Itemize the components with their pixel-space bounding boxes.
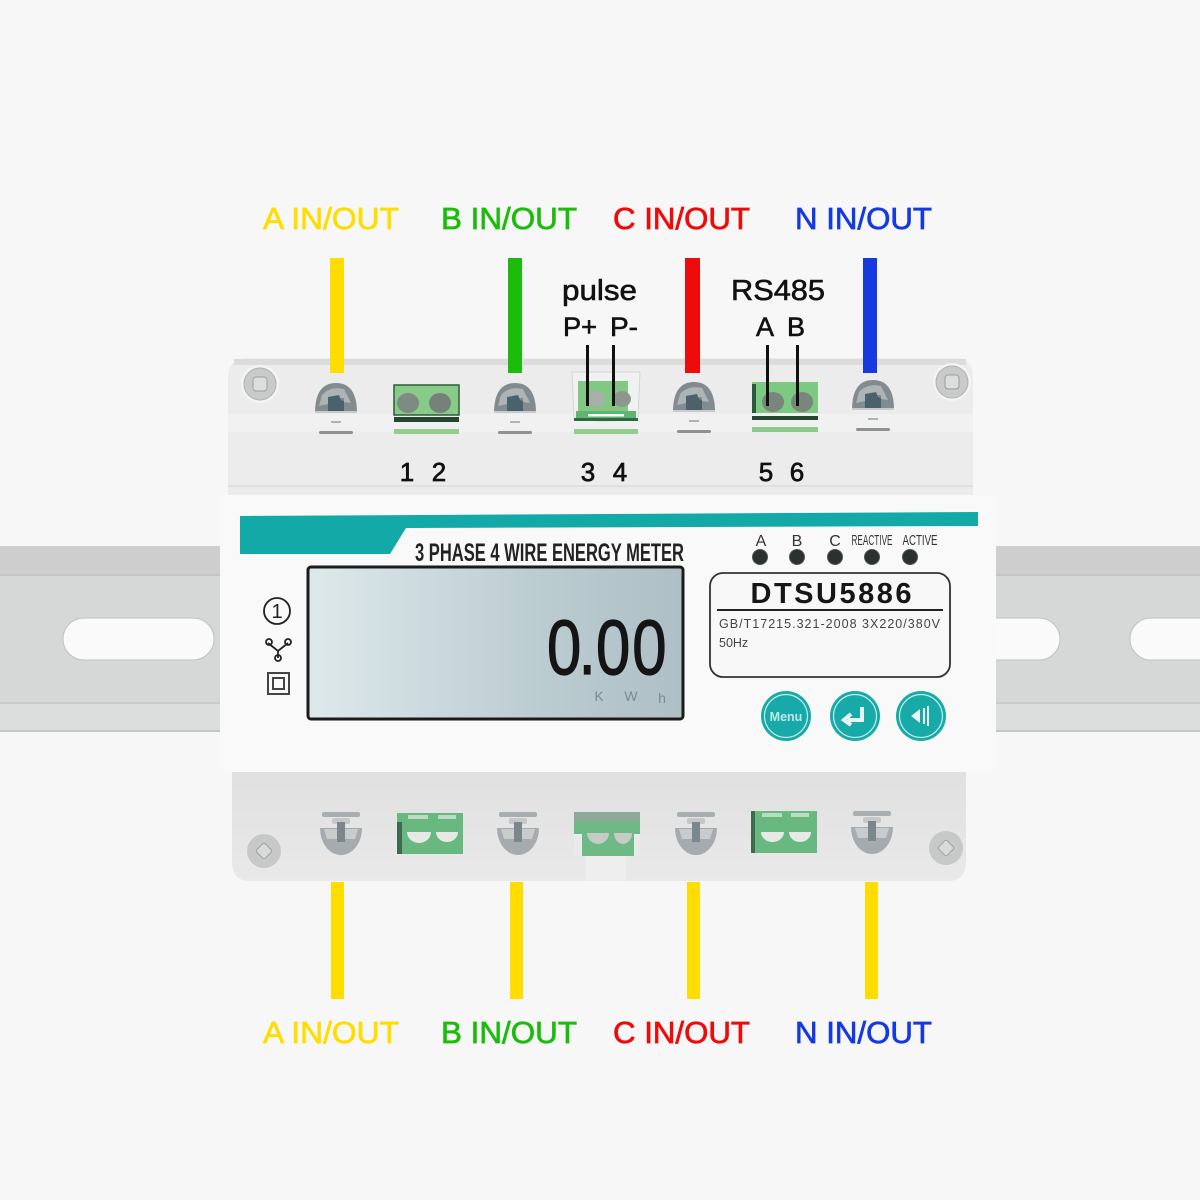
- top phase labels: N IN/OUT: [795, 202, 932, 236]
- lcd unit: W: [624, 688, 638, 704]
- green connector 1-2: [394, 385, 459, 434]
- model label: [710, 573, 950, 677]
- top corner screw right: [933, 363, 971, 401]
- top phase labels: A IN/OUT: [263, 202, 399, 236]
- terminal numbers: 3: [581, 457, 595, 487]
- indicator leds: [752, 550, 918, 564]
- top corner screw left: [241, 365, 279, 403]
- rs485 label: B: [787, 312, 805, 342]
- bottom phase labels: C IN/OUT: [613, 1016, 750, 1050]
- pulse label: [562, 275, 638, 342]
- top phase labels: B IN/OUT: [441, 202, 577, 236]
- bottom green connector left: [397, 813, 463, 854]
- lcd unit: h: [658, 690, 666, 706]
- lcd unit: [594, 688, 666, 706]
- bottom corner screw left: [247, 834, 281, 868]
- top phase labels: C IN/OUT: [613, 202, 750, 236]
- indicator labels: B: [792, 533, 802, 550]
- indicator labels: ACTIVE: [902, 532, 938, 549]
- back button: [896, 691, 946, 741]
- class symbol: 1: [271, 601, 283, 623]
- indicator labels: C: [829, 533, 841, 550]
- din rail right: [960, 546, 1200, 732]
- enter button: [830, 691, 880, 741]
- top screw terminals: [315, 380, 894, 434]
- model label: GB/T17215.321-2008 3X220/380V: [719, 617, 941, 631]
- bottom green connector middle: [574, 812, 640, 881]
- top phase labels: [263, 202, 932, 236]
- terminal numbers: 4: [613, 457, 627, 487]
- din rail left: [0, 546, 225, 732]
- bottom wires: [331, 882, 878, 999]
- terminal numbers: 1: [400, 457, 414, 487]
- green connector 5-6: [752, 382, 818, 432]
- class symbol: [264, 598, 290, 624]
- top terminal cover: [228, 358, 973, 498]
- product heading: 3 PHASE 4 WIRE ENERGY METER: [415, 539, 684, 567]
- rs485 label: [731, 275, 825, 342]
- bottom corner screw right: [929, 831, 963, 865]
- terminal numbers: 2: [432, 457, 446, 487]
- signal wires rs485: [766, 345, 799, 406]
- terminal numbers: 5: [759, 457, 773, 487]
- menu button: Menu: [770, 710, 802, 724]
- bottom phase labels: A IN/OUT: [263, 1016, 399, 1050]
- bottom phase labels: N IN/OUT: [795, 1016, 932, 1050]
- lcd display: [308, 567, 683, 719]
- rs485 label: A: [756, 312, 774, 342]
- indicator labels: A: [756, 533, 767, 550]
- pulse label: P+: [563, 312, 597, 342]
- model label: DTSU5886: [750, 578, 912, 610]
- model label: 50Hz: [719, 636, 748, 650]
- star wiring symbol: [266, 639, 291, 661]
- lcd reading: 0.00: [547, 603, 667, 691]
- bottom screw terminals: [320, 811, 893, 855]
- bottom phase labels: B IN/OUT: [441, 1016, 577, 1050]
- pulse label: pulse: [562, 275, 637, 307]
- pulse label: P-: [610, 312, 638, 342]
- bottom green connector right: [751, 811, 817, 853]
- green connector 3-4: [572, 372, 640, 434]
- terminal numbers: [400, 457, 804, 487]
- teal header band: [240, 512, 978, 554]
- menu button: [761, 691, 811, 741]
- signal wires pulse: [586, 345, 615, 406]
- lcd unit: K: [594, 688, 604, 704]
- meter body: [220, 495, 996, 772]
- terminal numbers: 6: [790, 457, 804, 487]
- top wires: [330, 258, 877, 373]
- indicator labels: REACTIVE: [852, 532, 892, 549]
- indicator labels: [756, 532, 938, 550]
- double insulation symbol: [268, 673, 289, 694]
- bottom terminal cover: [232, 772, 966, 881]
- bottom phase labels: [263, 1016, 932, 1050]
- rs485 label: RS485: [731, 275, 825, 307]
